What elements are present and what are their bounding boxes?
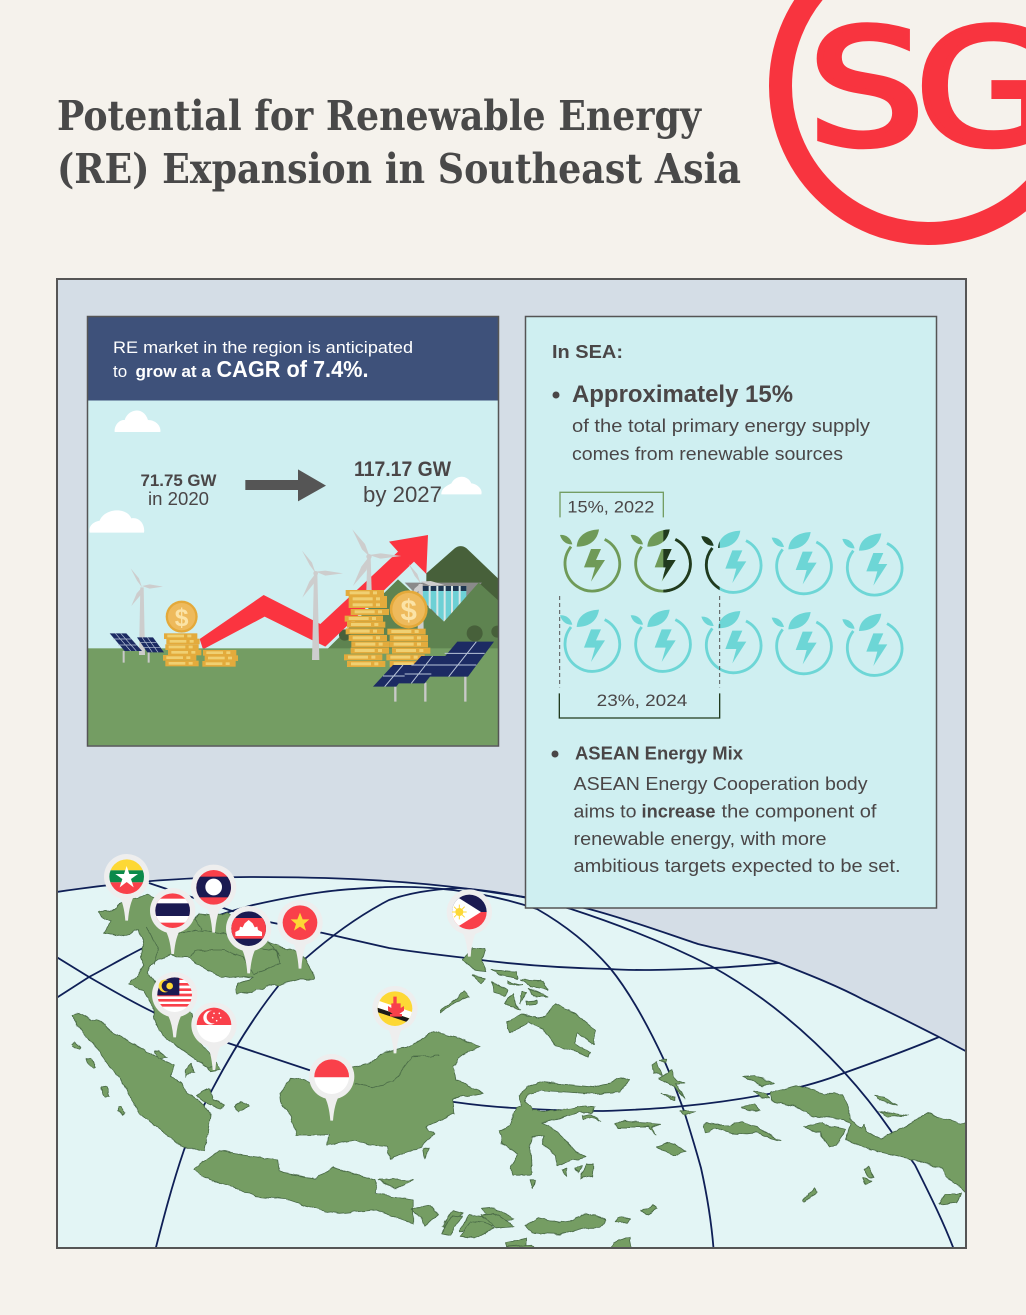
bullet: ASEAN energy mix: renewable energy, with more bbox=[574, 829, 826, 849]
coin: right bbox=[390, 590, 428, 628]
bullet: ASEAN energy mix: aims to bbox=[574, 802, 636, 822]
text: 2027 capacity: 117.17 GW bbox=[354, 458, 451, 481]
right solar panels bbox=[373, 642, 494, 702]
growth arrow bbox=[200, 535, 428, 649]
bullet: approximately 15%: Approximately 15% bbox=[572, 381, 793, 408]
icons: row two bbox=[560, 610, 902, 675]
pin: Malaysia bbox=[152, 972, 197, 1037]
logo: SG: S bbox=[808, 0, 925, 182]
frame border bbox=[57, 279, 966, 1248]
mountains and dam bbox=[328, 546, 498, 648]
Philippines bbox=[440, 948, 594, 1057]
coin: left: $ bbox=[175, 605, 189, 632]
header text: grow at a bbox=[136, 362, 212, 381]
coin: left bbox=[166, 601, 198, 633]
Sumatra bbox=[71, 1013, 211, 1152]
country flag pins bbox=[104, 854, 492, 1121]
bullet: ASEAN energy mix bbox=[552, 744, 900, 876]
pin: Indonesia bbox=[309, 1054, 354, 1121]
text: 2020 capacity bbox=[140, 471, 217, 509]
bullet: approximately 15% bbox=[552, 381, 870, 464]
header text bbox=[113, 338, 413, 382]
bullet: ASEAN energy mix: the component of bbox=[722, 802, 878, 822]
mainland Southeast Asia and Malay Peninsula bbox=[99, 895, 314, 1072]
globe grid lines bbox=[50, 877, 975, 1255]
pin: Myanmar bbox=[104, 854, 149, 921]
header text: CAGR of 7.4%. bbox=[216, 356, 368, 382]
pin: Cambodia bbox=[226, 906, 271, 973]
coin: right: $ bbox=[401, 594, 417, 627]
arrow: 2020 to 2027 bbox=[245, 469, 326, 501]
heading: In SEA: In SEA: bbox=[552, 342, 623, 362]
bracket: 23%, 2024: 23%, 2024 bbox=[597, 691, 687, 710]
ground bbox=[88, 648, 501, 747]
pictogram: renewable share bbox=[559, 492, 902, 718]
bullet: ASEAN energy mix: ASEAN Energy Cooperation body bbox=[574, 774, 868, 794]
title bbox=[57, 92, 741, 193]
clouds bbox=[89, 411, 482, 533]
left solar panels bbox=[110, 633, 164, 663]
land: eastern archipelago bbox=[440, 948, 976, 1258]
bullet: approximately 15%: of the total primary energy supply bbox=[572, 416, 870, 436]
Flores, Timor and Papua fragments bbox=[442, 1205, 656, 1258]
illustration: renewable landscape bbox=[88, 411, 503, 747]
pin: Brunei bbox=[372, 986, 418, 1053]
wind turbines bbox=[131, 529, 445, 660]
header text: RE market in the region is anticipated bbox=[113, 338, 413, 357]
text: 2027 capacity: by 2027 bbox=[363, 482, 442, 507]
bullet: ASEAN energy mix: increase bbox=[642, 802, 716, 822]
pin: Vietnam bbox=[277, 900, 323, 969]
logo: SG bbox=[780, 0, 1026, 234]
Sulawesi and Maluku bbox=[499, 1060, 780, 1189]
land: western archipelago and mainland bbox=[71, 895, 526, 1248]
header text: to bbox=[113, 362, 127, 381]
bullet: ASEAN energy mix: ASEAN Energy Mix bbox=[575, 744, 743, 764]
globe bbox=[50, 877, 975, 1260]
Java and Lesser Sunda islands bbox=[193, 1148, 526, 1248]
pin: Thailand bbox=[150, 888, 195, 954]
bullet: ASEAN energy mix: ambitious targets expected to be set. bbox=[574, 856, 900, 876]
title: (RE) Expansion in Southeast Asia bbox=[57, 145, 741, 193]
pin: Laos bbox=[191, 865, 236, 933]
Borneo bbox=[280, 1032, 483, 1158]
bracket: 15%, 2022: 15%, 2022 bbox=[567, 498, 654, 517]
pin: Philippines bbox=[447, 889, 492, 957]
panel header bbox=[88, 316, 498, 400]
map of Southeast Asia bbox=[50, 854, 976, 1260]
text: 2020 capacity: 71.75 GW bbox=[140, 471, 217, 490]
bracket: 23%, 2024 bbox=[559, 691, 720, 718]
panel sky background bbox=[88, 400, 499, 746]
Borneo border bbox=[354, 1056, 439, 1087]
text: 2027 capacity bbox=[354, 458, 451, 507]
icons: row one bbox=[560, 529, 902, 595]
gold coin stacks bbox=[163, 590, 430, 667]
title: Potential for Renewable Energy bbox=[57, 92, 702, 140]
panel: RE market growth bbox=[88, 316, 503, 747]
country borders bbox=[147, 913, 280, 975]
text: 2020 capacity: in 2020 bbox=[148, 489, 209, 509]
pin: Singapore bbox=[191, 1002, 237, 1070]
bullet: approximately 15%: comes from renewable sources bbox=[572, 444, 843, 464]
New Guinea bbox=[771, 1085, 976, 1209]
bracket: 15%, 2022 bbox=[560, 492, 663, 517]
small western islands bbox=[72, 1042, 249, 1115]
main frame background bbox=[57, 279, 966, 1248]
panel: In SEA bbox=[526, 316, 936, 908]
